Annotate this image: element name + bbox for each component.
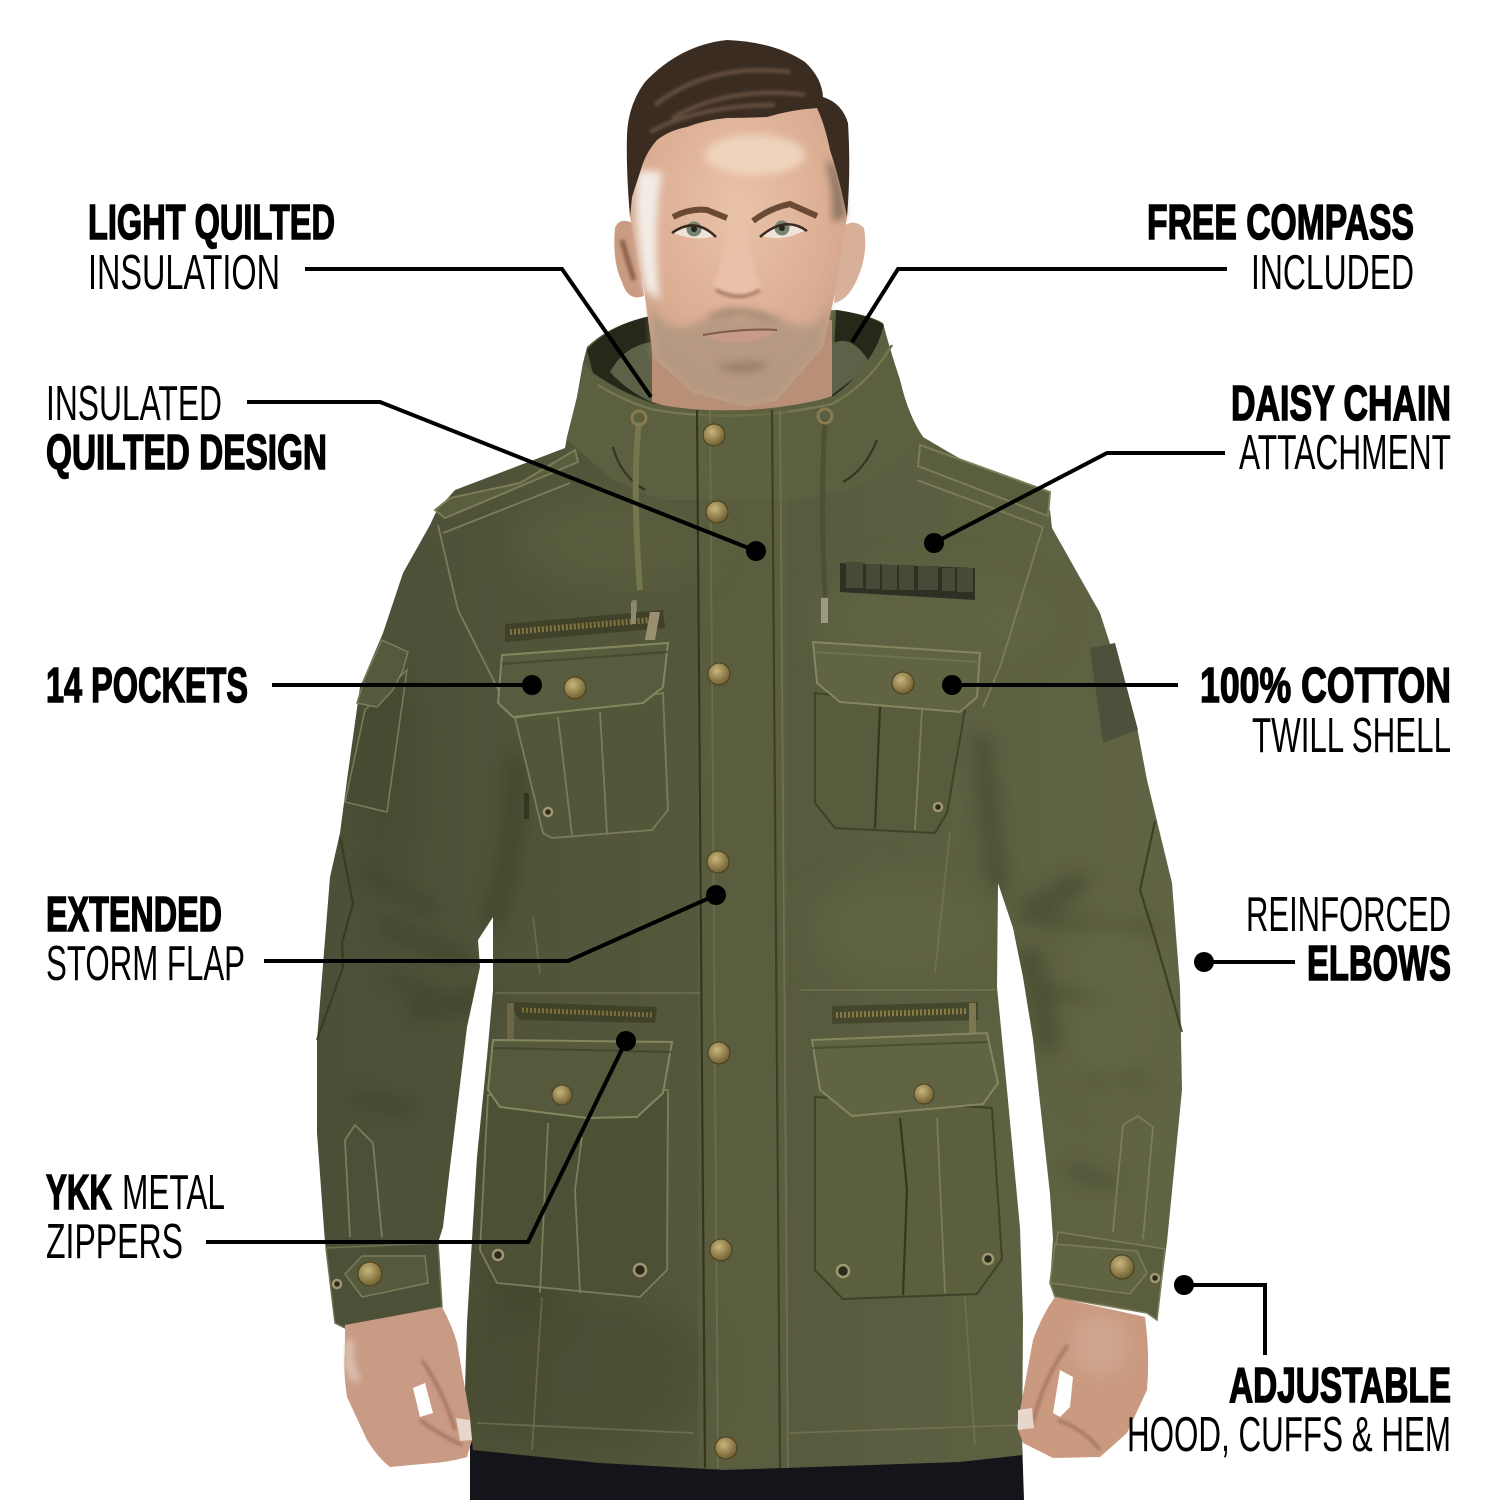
- elbow seams: [317, 837, 353, 1040]
- photo: man wearing jacket: [317, 40, 1182, 1500]
- left hand: [344, 1307, 472, 1467]
- hood lining: [610, 341, 868, 403]
- sleeve plackets: [345, 1116, 1153, 1239]
- label: ykk metal zippers: METAL: [122, 1166, 225, 1220]
- ears: [614, 221, 865, 303]
- pocket: right chest: [813, 642, 980, 833]
- hair highlights: [650, 70, 805, 132]
- eyelets: [333, 803, 1159, 1288]
- shading and wrinkles: [357, 490, 1150, 1450]
- daisy chain: [840, 562, 975, 600]
- label: ykk metal zippers: YKK: [46, 1166, 112, 1220]
- hem: [477, 1423, 1020, 1433]
- label: light quilted insulation: LIGHT QUILTED: [88, 196, 335, 250]
- label: ykk metal zippers: [46, 1031, 636, 1269]
- lower zipper left: [507, 1002, 657, 1041]
- label: free compass included: [852, 196, 1414, 342]
- lower zipper right: [832, 1002, 978, 1043]
- pocket: left chest: [498, 643, 668, 838]
- label: ykk metal zippers: ZIPPERS: [46, 1215, 183, 1269]
- label: free compass included: INCLUDED: [1251, 246, 1414, 300]
- snap buttons: [358, 424, 1134, 1459]
- label: 14 pockets: [46, 659, 542, 713]
- label: daisy chain attachment: [924, 377, 1451, 553]
- chest zipper left: [505, 602, 665, 642]
- face: [630, 100, 847, 407]
- velcro patch: [1090, 643, 1138, 743]
- right hand: [1017, 1297, 1148, 1458]
- label: light quilted insulation: [88, 196, 651, 397]
- label: extended storm flap: STORM FLAP: [46, 937, 245, 991]
- epaulettes and yoke: [435, 445, 1050, 707]
- label: reinforced elbows: [1194, 888, 1451, 991]
- face details: [636, 135, 845, 407]
- sleeve pocket: [345, 640, 408, 812]
- cuffs: [326, 1232, 1165, 1328]
- neck: [652, 320, 832, 416]
- label: 14 pockets: 14 POCKETS: [46, 659, 248, 713]
- pocket: lower left: [480, 1040, 672, 1297]
- trousers: [470, 1440, 1024, 1500]
- storm flap placket: [697, 410, 788, 1468]
- label: 100% cotton twill shell: [942, 659, 1451, 763]
- label: light quilted insulation: INSULATION: [88, 246, 280, 300]
- hood front and drawcords: [567, 330, 923, 624]
- label: adjustable hood, cuffs and hem: [1127, 1275, 1451, 1462]
- body seams: [495, 832, 995, 1450]
- hood interior: [587, 310, 884, 404]
- hair: [627, 40, 849, 217]
- label: extended storm flap: [46, 885, 726, 991]
- pocket: lower right: [812, 1033, 1002, 1299]
- label: extended storm flap: EXTENDED: [46, 888, 222, 942]
- label: insulated quilted design: INSULATED: [46, 377, 222, 431]
- label: insulated quilted design: QUILTED DESIGN: [46, 426, 327, 480]
- label: insulated quilted design: [46, 377, 766, 561]
- jacket silhouette: [317, 310, 1182, 1470]
